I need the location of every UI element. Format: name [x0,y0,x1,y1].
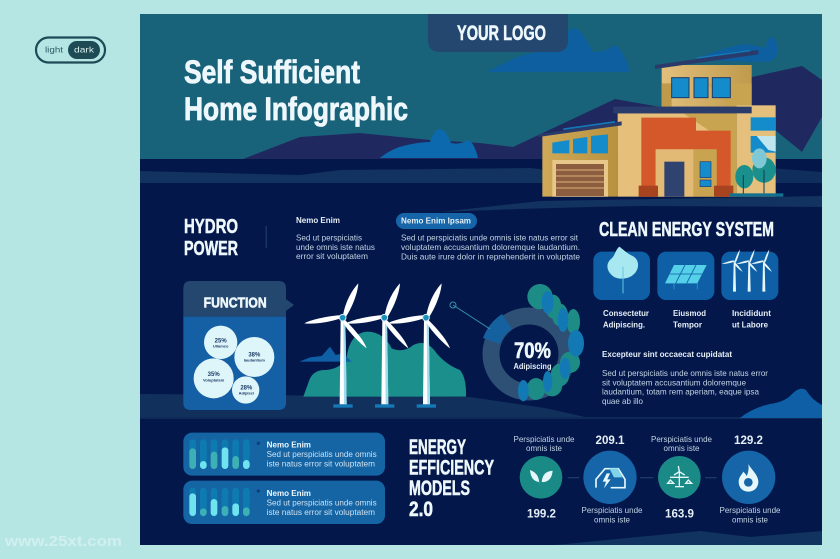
card: nemo enim 2: Nemo Enim [267,489,311,498]
cloud: behind logo [487,28,630,72]
logo tab: YOUR LOGO [457,22,546,45]
chart: donut 70%: 70% [514,338,551,363]
title: Home Infographic [184,91,408,127]
text block: nemo enim ipsam [396,213,580,262]
labels: clean energy items: ut Labore [732,320,768,330]
icon: leaf [520,456,562,499]
cloud: behind house [695,37,777,62]
panel: function: Adipisci [239,390,254,395]
house illustration [538,50,783,197]
panel: function: FUNCTION [204,294,267,311]
turbine 1 [304,283,367,408]
labels: clean energy items: Consectetur [603,308,650,318]
text block: nemo enim ipsam: voluptatem accusantium doloremque laudantium. [401,242,580,252]
labels: energy models: omnis iste [664,443,700,453]
labels: energy models: 209.1 [596,435,625,447]
text block: nemo enim: Sed ut perspiciatis [296,232,362,242]
labels: clean energy items: Incididunt [732,308,771,318]
labels: energy models: omnis iste [594,514,630,524]
labels: clean energy items [603,308,771,330]
labels: clean energy items: Adipiscing. [603,320,645,330]
toggle: light dark: light [45,44,64,54]
toggle: light dark [36,38,105,62]
card: nemo enim 2: Sed ut perspiciatis unde omnis [267,498,377,507]
text block: excepteur: quae ab illo [602,396,643,406]
text block: nemo enim ipsam: Duis aute irure dolor in reprehenderit in voluptate [401,252,580,262]
labels: energy models: omnis iste [732,514,768,524]
heading: energy efficiency models: ENERGY [409,436,466,459]
labels: energy models: 199.2 [527,508,556,520]
labels: energy models: 163.9 [665,508,694,520]
header sky [140,14,822,159]
title [184,54,408,127]
title: Self Sufficient [184,54,360,90]
chart: donut 70%: Adipiscing [514,361,552,371]
text block: excepteur: laudantium, totam rem aperiam, eaque ipsa [602,386,759,396]
icon: solar house [583,451,637,504]
text block: nemo enim: Nemo Enim [296,215,340,225]
panel: function: laudantium [244,358,265,363]
card: nemo enim 1: Nemo Enim [267,441,311,450]
cloud: left of house [380,129,478,158]
chart: donut 70% [450,284,584,401]
text block: nemo enim [296,215,375,261]
text block: nemo enim: unde omnis iste natus [296,242,375,252]
labels: energy models: Perspiciatis unde [514,434,575,444]
text block: nemo enim ipsam: Sed ut perspiciatis unde omnis iste natus error sit [401,232,579,242]
heading: energy efficiency models: EFFICIENCY [409,456,494,480]
text block: nemo enim ipsam: Nemo Enim Ipsam [401,216,471,226]
icon tiles: clean energy [593,247,778,300]
panel: function [183,281,294,410]
card: nemo enim 1: iste natus error sit voluptatem [267,460,375,469]
heading: energy efficiency models: 2.0 [409,498,433,521]
text: hydro power heading [184,216,238,260]
card: nemo enim 2: iste natus error sit voluptatem [267,508,375,517]
panel: infographic background [140,14,822,545]
text block: nemo enim: error sit voluptatem [296,251,368,261]
icon: flame [722,451,775,504]
labels: clean energy items: Eiusmod [673,308,706,318]
turbine 2 [346,283,408,408]
turbine 3 [388,283,450,408]
labels: energy models [514,434,781,524]
text: hydro power heading: POWER [184,238,238,260]
logo tab [428,14,568,52]
panel: function: 28% [240,385,253,391]
icon: wind turbines [721,249,778,300]
card: nemo enim 1 [183,433,385,476]
panel: function: Voluptatem [203,378,225,383]
panel: function: Ullamco [213,343,229,348]
icon: tree [593,247,650,300]
card: nemo enim 2 [183,481,385,524]
card: nemo enim 1: Sed ut perspiciatis unde omnis [267,450,377,459]
text block: excepteur: Excepteur sint occaecat cupidatat [602,349,732,359]
chart: wind turbines and hills [299,283,466,408]
text block: excepteur [602,349,768,406]
text: hydro power heading: HYDRO [184,216,238,238]
energy models timeline [520,451,775,504]
icon: scale turbine [658,456,701,499]
labels: energy models: 129.2 [734,435,763,447]
labels: energy models: Perspiciatis unde [582,505,643,515]
heading: energy efficiency models: MODELS [409,477,470,500]
ground strip [140,389,822,419]
labels: clean energy items: Tempor [673,320,703,330]
trees on donut [518,284,584,401]
watermark: www.25xt.com [4,534,122,550]
labels: energy models: omnis iste [526,443,562,453]
heading: energy efficiency models [409,436,494,521]
icon: solar panel [657,252,714,300]
panel: function: 38% [248,353,261,359]
labels: energy models: Perspiciatis unde [720,505,781,515]
panel: function: 25% [215,338,227,344]
ground bands [140,159,822,212]
toggle: light dark: dark [74,44,95,54]
bottom wave [555,531,822,545]
text block: excepteur: sit voluptatem accusantium doloremque [602,378,746,388]
panel: function: 35% [208,372,220,378]
mountains [243,66,822,159]
labels: energy models: Perspiciatis unde [651,434,712,444]
text block: excepteur: Sed ut perspiciatis unde omnis iste natus error [602,368,768,378]
